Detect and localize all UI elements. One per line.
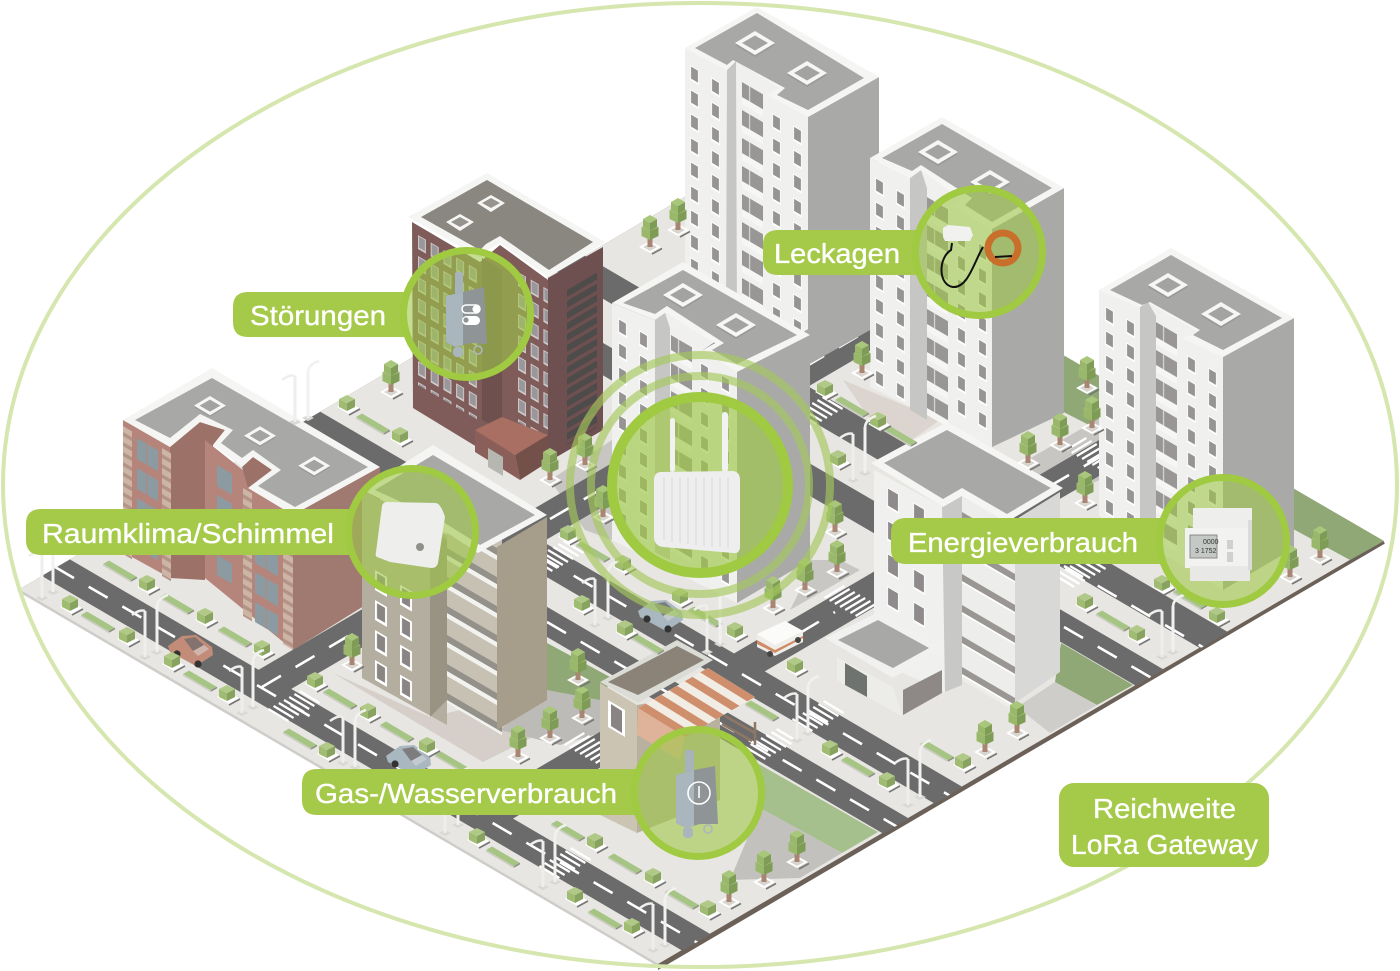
gateway range rings (570, 355, 830, 615)
red brick building (123, 368, 380, 650)
label: Energieverbrauch (891, 518, 1161, 564)
icon: energy meter: 0000 (1203, 539, 1219, 546)
icon: energy meter (1185, 508, 1252, 581)
label: Energieverbrauch: Energieverbrauch (908, 527, 1138, 558)
icon: fault sensor (446, 272, 487, 357)
callout: Raumklima/Schimmel (26, 468, 476, 596)
label: Leckagen (763, 230, 917, 275)
label: Gas-/Wasserverbrauch: Gas-/Wasserverbrauch (315, 778, 617, 809)
icon: room climate sensor (376, 502, 445, 568)
white building lower right (825, 422, 1063, 717)
callout: LoRa gateway (612, 397, 788, 573)
icon: leak sensor with cable (941, 225, 1018, 287)
label: Gas-/Wasserverbrauch (302, 769, 636, 815)
brown building (408, 173, 605, 480)
cars and ambulance (168, 600, 803, 778)
median strips (81, 396, 1207, 930)
legend label: Reichweite LoRa Gateway (1059, 783, 1269, 867)
label: Störungen (233, 292, 404, 337)
cafe with striped awning (600, 640, 755, 833)
planters (60, 380, 1230, 938)
tower building back (685, 7, 879, 371)
label: Raumklima/Schimmel: Raumklima/Schimmel (42, 518, 334, 549)
road network (44, 256, 1228, 950)
label: Raumklima/Schimmel (26, 509, 350, 555)
callout: Energieverbrauch (891, 478, 1286, 604)
callout: Gas-/Wasserverbrauch (302, 730, 762, 856)
crosswalks (268, 397, 1118, 878)
trees (341, 198, 1332, 909)
legend label: Reichweite LoRa Gateway: Reichweite (1093, 793, 1236, 824)
icon: energy meter: 3 1752 (1195, 548, 1217, 555)
tan building (362, 445, 547, 735)
callout: Leckagen (763, 188, 1042, 316)
tower building right (1099, 248, 1294, 590)
icon: gas and water meter sensor (676, 750, 718, 838)
street lamps (29, 361, 1184, 953)
lawns and pads (333, 355, 1384, 880)
centre tower behind gateway (612, 262, 810, 603)
label: Störungen: Störungen (250, 300, 386, 331)
icon: gateway with antennas (654, 412, 740, 553)
label: Leckagen: Leckagen (774, 238, 900, 269)
tower building Leckagen (870, 117, 1064, 447)
callout: Störungen (233, 250, 530, 378)
legend label: Reichweite LoRa Gateway: LoRa Gateway (1071, 829, 1258, 860)
